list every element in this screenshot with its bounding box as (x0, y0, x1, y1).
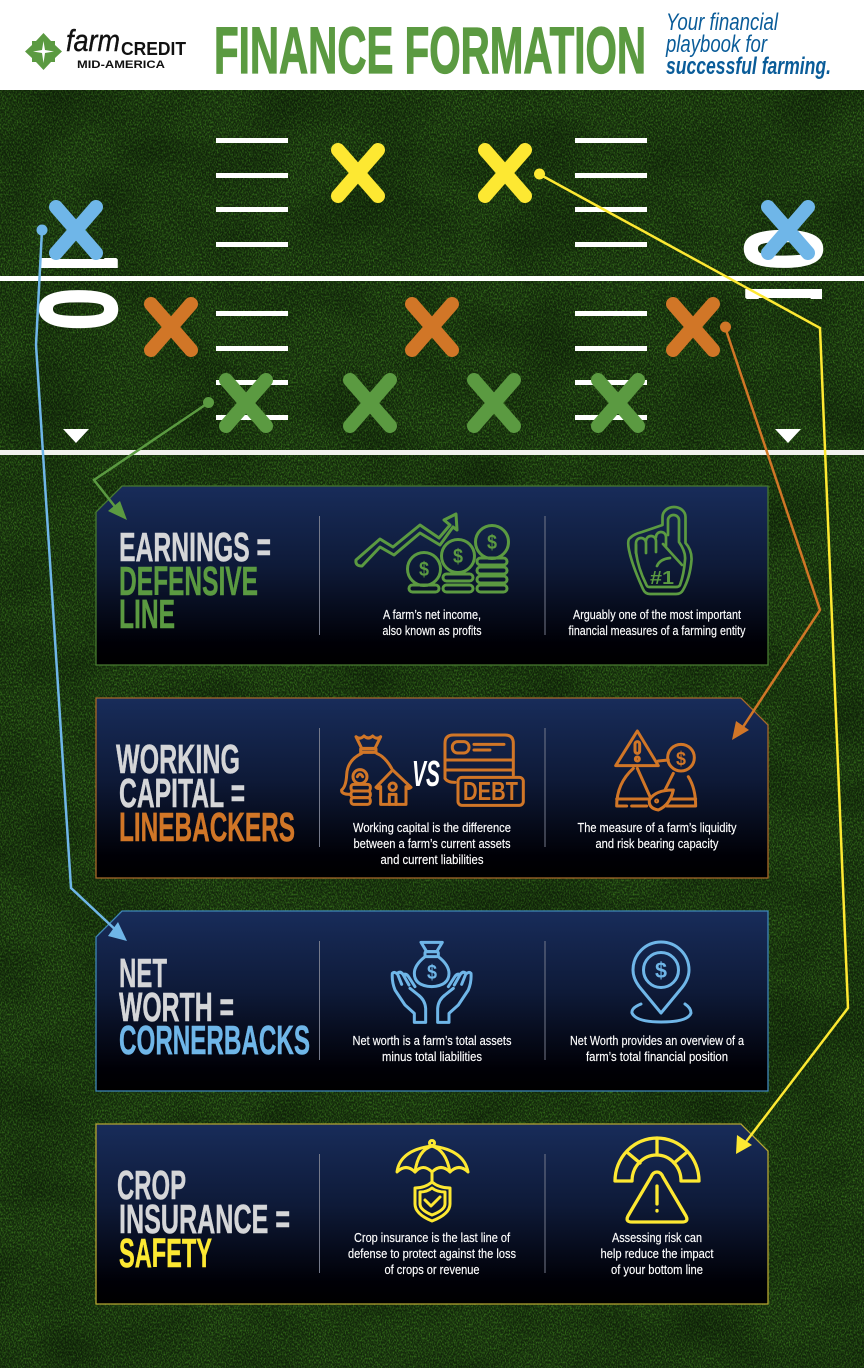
logo: Farm Credit Mid-America: farm (66, 23, 120, 58)
text: working capital definition: and current liabilities (380, 852, 484, 867)
icon: rising line and coins: $ (487, 532, 497, 554)
text: net income: also known as profits (382, 623, 482, 638)
text: net income: Arguably one of the most important (573, 607, 741, 622)
text: working capital definition: Working capital is the difference (353, 820, 511, 835)
icon: rising line and coins: $ (419, 559, 429, 581)
logo: Farm Credit Mid-America: MID-AMERICA (77, 59, 165, 71)
tagline: Your financial (666, 9, 779, 36)
text: net income (382, 607, 746, 638)
yard number right: 10 (744, 230, 824, 299)
icon: gauge with warning triangle (615, 1138, 699, 1222)
header band (0, 0, 864, 90)
text: net worth definition: Net Worth provides an overview of a (570, 1033, 745, 1048)
yard number right: 10: 1 (721, 275, 846, 315)
heading: crop insurance: SAFETY (119, 1230, 212, 1276)
heading: crop insurance: CROP (117, 1162, 186, 1208)
text: net income: financial measures of a farming entity (568, 623, 746, 638)
tagline: playbook for (665, 31, 768, 58)
heading: net worth: NET (119, 950, 167, 996)
text: working capital definition: between a farm’s current assets (354, 836, 511, 851)
logo: Farm Credit Mid-America (25, 23, 186, 71)
heading: working capital: CAPITAL = (119, 770, 245, 816)
heading: working capital: LINEBACKERS (119, 804, 295, 850)
icon: assets versus debt: DEBT (463, 776, 518, 806)
text: working capital definition (353, 820, 737, 867)
text: net income: A farm’s net income, (383, 607, 481, 622)
icon: hands holding money bag (392, 942, 471, 1022)
icon: foam finger (628, 507, 692, 594)
text: net worth definition (352, 1033, 745, 1064)
yard number left: 10: 1 (17, 242, 142, 282)
field direction triangles (63, 429, 801, 443)
icon: risk and liquidity (616, 731, 696, 810)
heading: crop insurance (117, 1162, 290, 1276)
text: crop insurance definition: of crops or revenue (384, 1262, 480, 1277)
icon: leaf (25, 33, 62, 70)
heading: earnings: EARNINGS = (119, 524, 271, 570)
heading: net worth (119, 950, 310, 1063)
text: working capital definition: The measure of a farm’s liquidity (578, 820, 737, 835)
arrow: linebackers route (720, 322, 820, 740)
panel: crop insurance (96, 1124, 768, 1304)
text: crop insurance definition: defense to protect against the loss (348, 1246, 516, 1261)
heading: net worth: WORTH = (119, 984, 234, 1030)
panel: working capital (96, 698, 768, 878)
arrow: cornerbacks route (36, 224, 127, 941)
formation: linebackers (151, 304, 713, 350)
icon: assets versus debt (342, 735, 523, 806)
yard number left: 10: 0 (18, 288, 139, 330)
text: crop insurance definition: of your bottom line (611, 1262, 703, 1277)
panel: net worth (96, 911, 768, 1091)
icon: risk and liquidity: $ (676, 749, 686, 770)
formation: defensive line (226, 380, 638, 426)
text: crop insurance definition: Crop insurance is the last line of (354, 1230, 510, 1245)
tagline (665, 9, 831, 80)
text: crop insurance definition: Assessing risk can (612, 1230, 702, 1245)
text: net worth definition: farm’s total financial position (586, 1049, 728, 1064)
heading: earnings (119, 524, 271, 637)
heading: crop insurance: INSURANCE = (119, 1196, 290, 1242)
icon: location pin with dollar (632, 942, 691, 1022)
heading: working capital (116, 736, 295, 850)
formation: cornerbacks (56, 207, 808, 253)
heading: working capital: WORKING (116, 736, 240, 782)
icon: location pin with dollar: $ (655, 958, 667, 983)
panel: earnings (96, 486, 768, 665)
text: crop insurance definition: help reduce the impact (600, 1246, 714, 1261)
icon: rising line and coins (356, 514, 508, 592)
icon: foam finger: #1 (650, 568, 674, 588)
text: crop insurance definition (348, 1230, 714, 1277)
icon: rising line and coins: $ (453, 546, 463, 568)
icon: hands holding money bag: $ (427, 962, 437, 984)
heading: earnings: DEFENSIVE (119, 558, 258, 604)
logo: Farm Credit Mid-America: CREDIT (121, 39, 186, 59)
arrow: safety route (534, 168, 848, 1154)
icon: assets versus debt: VS (412, 753, 440, 794)
yard number left: 10 (39, 258, 118, 328)
formation: safeties (338, 150, 525, 196)
heading: earnings: LINE (119, 591, 175, 637)
text: working capital definition: and risk bearing capacity (596, 836, 719, 851)
icon: umbrella over shield (397, 1140, 468, 1221)
yard number right: 10: 0 (723, 228, 844, 270)
text: net worth definition: minus total liabilities (382, 1049, 482, 1064)
heading: net worth: CORNERBACKS (119, 1017, 310, 1063)
text: net worth definition: Net worth is a farm’s total assets (352, 1033, 512, 1048)
arrow: defensive line route (94, 397, 214, 520)
